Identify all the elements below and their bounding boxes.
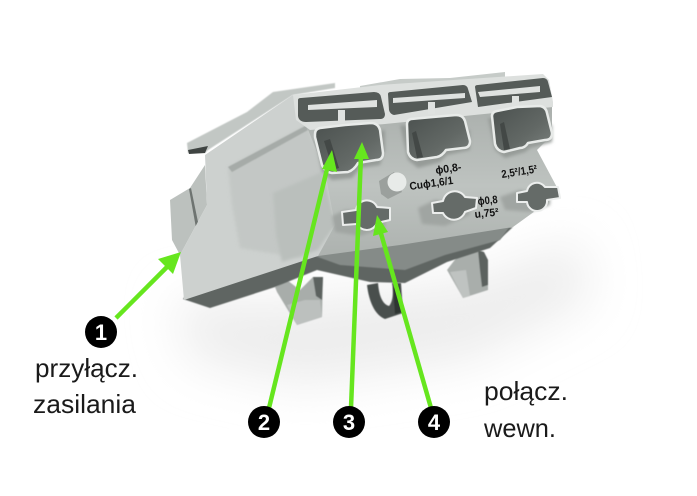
- label: power connection: przyłącz.: [35, 353, 138, 383]
- arrow 3: [351, 142, 369, 408]
- release slots: [342, 183, 560, 230]
- top lever frame: [293, 74, 553, 130]
- printed markings: ϕ0,8: [477, 194, 498, 208]
- printed markings: u,75²: [474, 207, 499, 221]
- label: power connection: zasilania: [33, 389, 137, 419]
- cylindrical pin: [379, 172, 406, 199]
- side recess: [228, 125, 335, 258]
- back tabs: [187, 83, 335, 153]
- printed markings: Cuϕ1,6/1: [409, 175, 454, 193]
- port inner shading: [324, 122, 510, 170]
- marker 4: [418, 406, 450, 438]
- printed markings: ϕ0,8-: [435, 161, 462, 177]
- side block: [273, 172, 335, 262]
- lever bars: [308, 100, 377, 110]
- marker 3: [333, 406, 365, 438]
- marker 4: 4: [428, 410, 441, 435]
- lever slots: [298, 92, 385, 122]
- label: internal connection: wewn.: [483, 413, 556, 443]
- arrow 2: [269, 150, 337, 408]
- label: internal connection: [483, 376, 568, 443]
- mounting clips: [275, 250, 488, 325]
- underside band: [183, 227, 513, 308]
- port outer shading: [315, 118, 552, 180]
- marker 2: 2: [258, 410, 270, 435]
- left side wall: [170, 165, 207, 255]
- marker 2: [248, 406, 280, 438]
- drop shadow below connector: [175, 240, 590, 385]
- wire entry ports: [315, 106, 552, 173]
- printed markings: [409, 161, 538, 221]
- marker 3: 3: [343, 410, 355, 435]
- slot bosses: [332, 190, 550, 236]
- label: internal connection: połącz.: [484, 376, 568, 406]
- front face: [305, 100, 560, 256]
- marker 1: [85, 316, 117, 348]
- marker 1: 1: [95, 320, 107, 345]
- label: power connection: [33, 353, 138, 419]
- connector body: [170, 72, 560, 325]
- arrow 1: [116, 252, 181, 318]
- arrow 4: [373, 215, 431, 408]
- main side face: [180, 95, 345, 300]
- printed markings: 2,5²/1,5²: [501, 163, 538, 181]
